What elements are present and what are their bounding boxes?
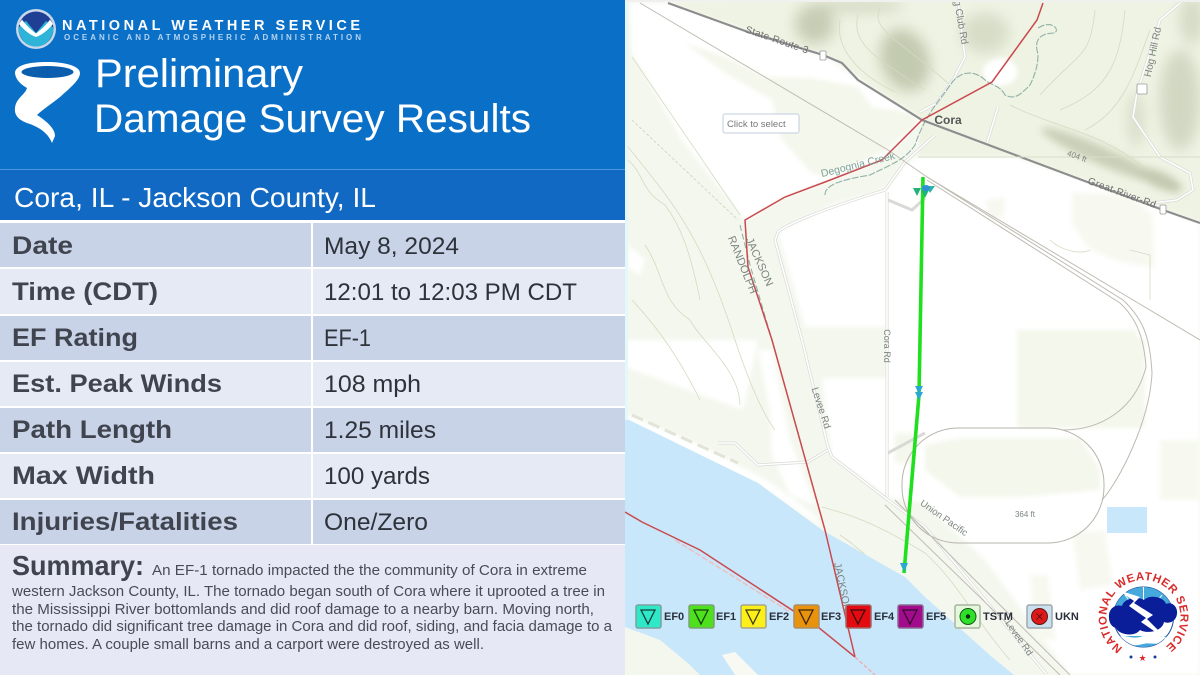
legend item: EF0 bbox=[636, 605, 684, 628]
row: Time: Time (CDT) bbox=[12, 278, 158, 306]
legend item: EF2 bbox=[741, 605, 789, 628]
map labels: Degognia Creek bbox=[820, 150, 897, 180]
map labels: 364 ft bbox=[1015, 510, 1036, 519]
row: Time bbox=[0, 269, 625, 314]
table: survey facts bbox=[0, 220, 625, 545]
county boundary: red lines bbox=[625, 3, 1043, 675]
map base: hill shading bbox=[795, 0, 1200, 150]
summary text: western Jackson County, IL. The tornado began south of Cora where it uprooted a tree in bbox=[11, 584, 605, 600]
location band: Cora, IL - Jackson County, IL bbox=[14, 182, 376, 213]
summary text: the Mississippi River bottomlands and did roof damage to a nearby barn. Moving north, bbox=[12, 602, 594, 618]
legend item: EF5 bbox=[898, 605, 946, 628]
row: Date bbox=[0, 223, 625, 267]
highway: State Route 3 / Great River Road bbox=[668, 3, 1200, 223]
bank revetment marks bbox=[632, 415, 738, 463]
legend item: EF4 bbox=[846, 605, 895, 628]
map labels: Levee Rd bbox=[809, 386, 832, 430]
map base: northeast wooded hills bbox=[668, 0, 1200, 222]
row: Est. Peak Winds: 108 mph bbox=[324, 371, 421, 398]
row: Max Width: 100 yards bbox=[324, 463, 430, 490]
row: Est. Peak Winds bbox=[0, 362, 625, 406]
map base: white cleared fields bbox=[625, 3, 1200, 675]
location band bbox=[0, 170, 625, 220]
panel: summary bbox=[0, 545, 625, 675]
map labels: Great-River-Rd bbox=[1086, 176, 1158, 211]
map labels: Hog Hill Rd bbox=[1143, 26, 1164, 78]
summary text bbox=[11, 563, 613, 653]
map base: ridge shading bbox=[1038, 121, 1185, 197]
pond bbox=[1107, 507, 1147, 533]
row: Path Length: 1.25 miles bbox=[324, 417, 436, 444]
logo: NOAA bbox=[16, 9, 56, 49]
map labels: Levee Rd bbox=[1002, 618, 1035, 658]
map labels bbox=[725, 0, 1164, 658]
logo: National Weather Service seal: ★ bbox=[1138, 653, 1147, 663]
summary text: the tornado did significant tree damage in Cora and did roof, siding, and facia damage to a bbox=[12, 619, 613, 635]
icon: tornado bbox=[15, 62, 80, 143]
row: EF Rating: EF Rating bbox=[12, 324, 138, 352]
row: Est. Peak Winds: Est. Peak Winds bbox=[12, 370, 222, 398]
row: Injuries/Fatalities: One/Zero bbox=[324, 509, 428, 536]
map labels: JACKSON bbox=[831, 561, 853, 613]
map left edge tint bbox=[625, 0, 628, 420]
panel: map of tornado track bbox=[625, 0, 1200, 675]
legend: EF rating symbols bbox=[636, 605, 1079, 628]
row: EF Rating: EF-1 bbox=[324, 325, 371, 352]
row: Time: 12:01 to 12:03 PM CDT bbox=[324, 279, 577, 306]
row: Max Width: Max Width bbox=[12, 462, 155, 490]
row: Injuries/Fatalities bbox=[0, 500, 625, 544]
map top edge tint bbox=[625, 0, 1200, 2]
summary heading: Summary: bbox=[12, 550, 144, 581]
road shields bbox=[820, 51, 1166, 214]
row: Path Length: Path Length bbox=[12, 416, 172, 444]
legend item: EF3: EF3 bbox=[821, 611, 841, 623]
legend item: EF4: EF4 bbox=[874, 611, 895, 623]
row: EF Rating bbox=[0, 316, 625, 360]
legend item: TSTM bbox=[955, 605, 1013, 628]
summary text: few homes. A couple small barns and a carport were destroyed as well. bbox=[12, 637, 484, 653]
legend item: UKN bbox=[1027, 605, 1079, 628]
legend item: TSTM: TSTM bbox=[983, 611, 1013, 623]
map labels: State-Route-3 bbox=[744, 25, 810, 56]
river bbox=[625, 418, 1014, 675]
sandbar bbox=[722, 652, 758, 675]
county line dashes bbox=[740, 225, 800, 440]
panel: header bbox=[0, 0, 625, 170]
legend item: EF5: EF5 bbox=[926, 611, 946, 623]
local roads and levee bbox=[718, 0, 1193, 675]
tornado track: green line with survey points bbox=[900, 177, 935, 573]
row: Injuries/Fatalities: Injuries/Fatalities bbox=[12, 508, 238, 536]
legend item: EF3 bbox=[794, 605, 841, 628]
map labels: 404 ft bbox=[1066, 149, 1089, 164]
township boundary line bbox=[918, 156, 1200, 158]
title: Preliminary bbox=[95, 52, 303, 96]
creek bbox=[825, 25, 1056, 195]
railroad tracks bbox=[640, 3, 1200, 675]
agency name: OCEANIC AND ATMOSPHERIC ADMINISTRATION bbox=[64, 33, 361, 42]
legend item: UKN: UKN bbox=[1055, 611, 1079, 623]
title: Damage Survey Results bbox=[94, 97, 531, 141]
map base: contour lines bbox=[625, 8, 1150, 675]
map labels: JACKSON bbox=[743, 236, 775, 288]
summary text: An EF-1 tornado impacted the the community of Cora in extreme bbox=[152, 563, 587, 579]
logo: National Weather Service seal: NATIONAL WEATHER SERVICE bbox=[1098, 572, 1188, 654]
row: Max Width bbox=[0, 454, 625, 498]
agency name bbox=[62, 18, 361, 42]
map base: pale green patches bbox=[685, 43, 1200, 640]
row: Date: May 8, 2024 bbox=[324, 233, 459, 260]
legend item: EF1: EF1 bbox=[716, 611, 736, 623]
row: Path Length bbox=[0, 408, 625, 452]
south river bank bbox=[625, 627, 700, 675]
click to select box: Click to select bbox=[727, 119, 786, 130]
map labels: RANDOLPH bbox=[725, 234, 759, 296]
row: Date: Date bbox=[12, 232, 73, 260]
legend item: EF0: EF0 bbox=[664, 611, 684, 623]
title bbox=[94, 52, 531, 141]
town label: Cora: Cora bbox=[934, 113, 962, 127]
map labels: Union Pacific bbox=[918, 498, 970, 539]
legend item: EF2: EF2 bbox=[769, 611, 789, 623]
map labels: Cora Rd bbox=[882, 329, 892, 363]
agency name: NATIONAL WEATHER SERVICE bbox=[62, 18, 360, 34]
click to select box bbox=[723, 114, 799, 133]
legend item: EF1 bbox=[689, 605, 736, 628]
